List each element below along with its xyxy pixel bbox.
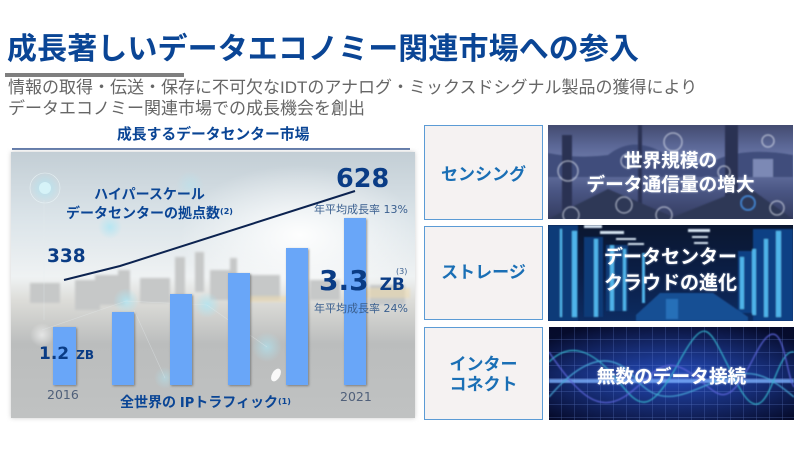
value 1.2 ZB: 1.2 ZB [39,344,94,364]
bar chart label: 全世界の IPトラフィック(1) [120,394,291,411]
image panel: global data traffic [548,125,793,219]
growth rate 13%: 年平均成長率 13% [314,203,408,216]
panel: data center market chart [9,149,417,420]
value 628: 628 [336,164,389,194]
value 338: 338 [47,246,86,267]
heading rule [12,148,410,150]
title: 成長著しいデータエコノミー関連市場への参入 [7,33,639,66]
year 2016: 2016 [47,387,79,402]
box: interconnect: コネクト [450,374,518,394]
trend label: データセンターの拠点数(2) [66,205,233,221]
box: storage: ストレージ [441,263,526,282]
box: interconnect: インター [450,354,518,374]
chart heading: 成長するデータセンター市場 [117,127,309,143]
caption [586,150,755,194]
title underline [5,73,184,77]
caption: クラウドの進化 [604,273,737,294]
caption: 世界規模の [624,150,717,171]
trend line [64,191,355,280]
box: storage [424,226,543,320]
subtitle: 情報の取得・伝送・保存に不可欠なIDTのアナログ・ミックスドシグナル製品の獲得により [8,78,697,97]
box: sensing: センシング [441,164,526,184]
box: interconnect [424,327,543,420]
caption: 無数のデータ接続 [597,366,746,387]
image panel: data center cloud [548,225,793,321]
caption: データ通信量の増大 [586,174,755,194]
caption [604,246,738,294]
bars [53,218,366,385]
value 3.3 ZB: 3.3 ZB [319,264,405,297]
growth rate 24%: 年平均成長率 24% [314,302,408,315]
subtitle [8,78,697,118]
footnote 3: (3) [396,267,407,276]
subtitle: データエコノミー関連市場での成長機会を創出 [8,98,365,118]
year 2021: 2021 [340,389,372,404]
box: sensing [424,125,543,220]
trend label: ハイパースケール [94,186,205,202]
chart background and graphics [9,149,417,420]
image panel: countless data connections [549,327,794,420]
caption: データセンター [604,247,737,268]
trend label [66,186,233,221]
